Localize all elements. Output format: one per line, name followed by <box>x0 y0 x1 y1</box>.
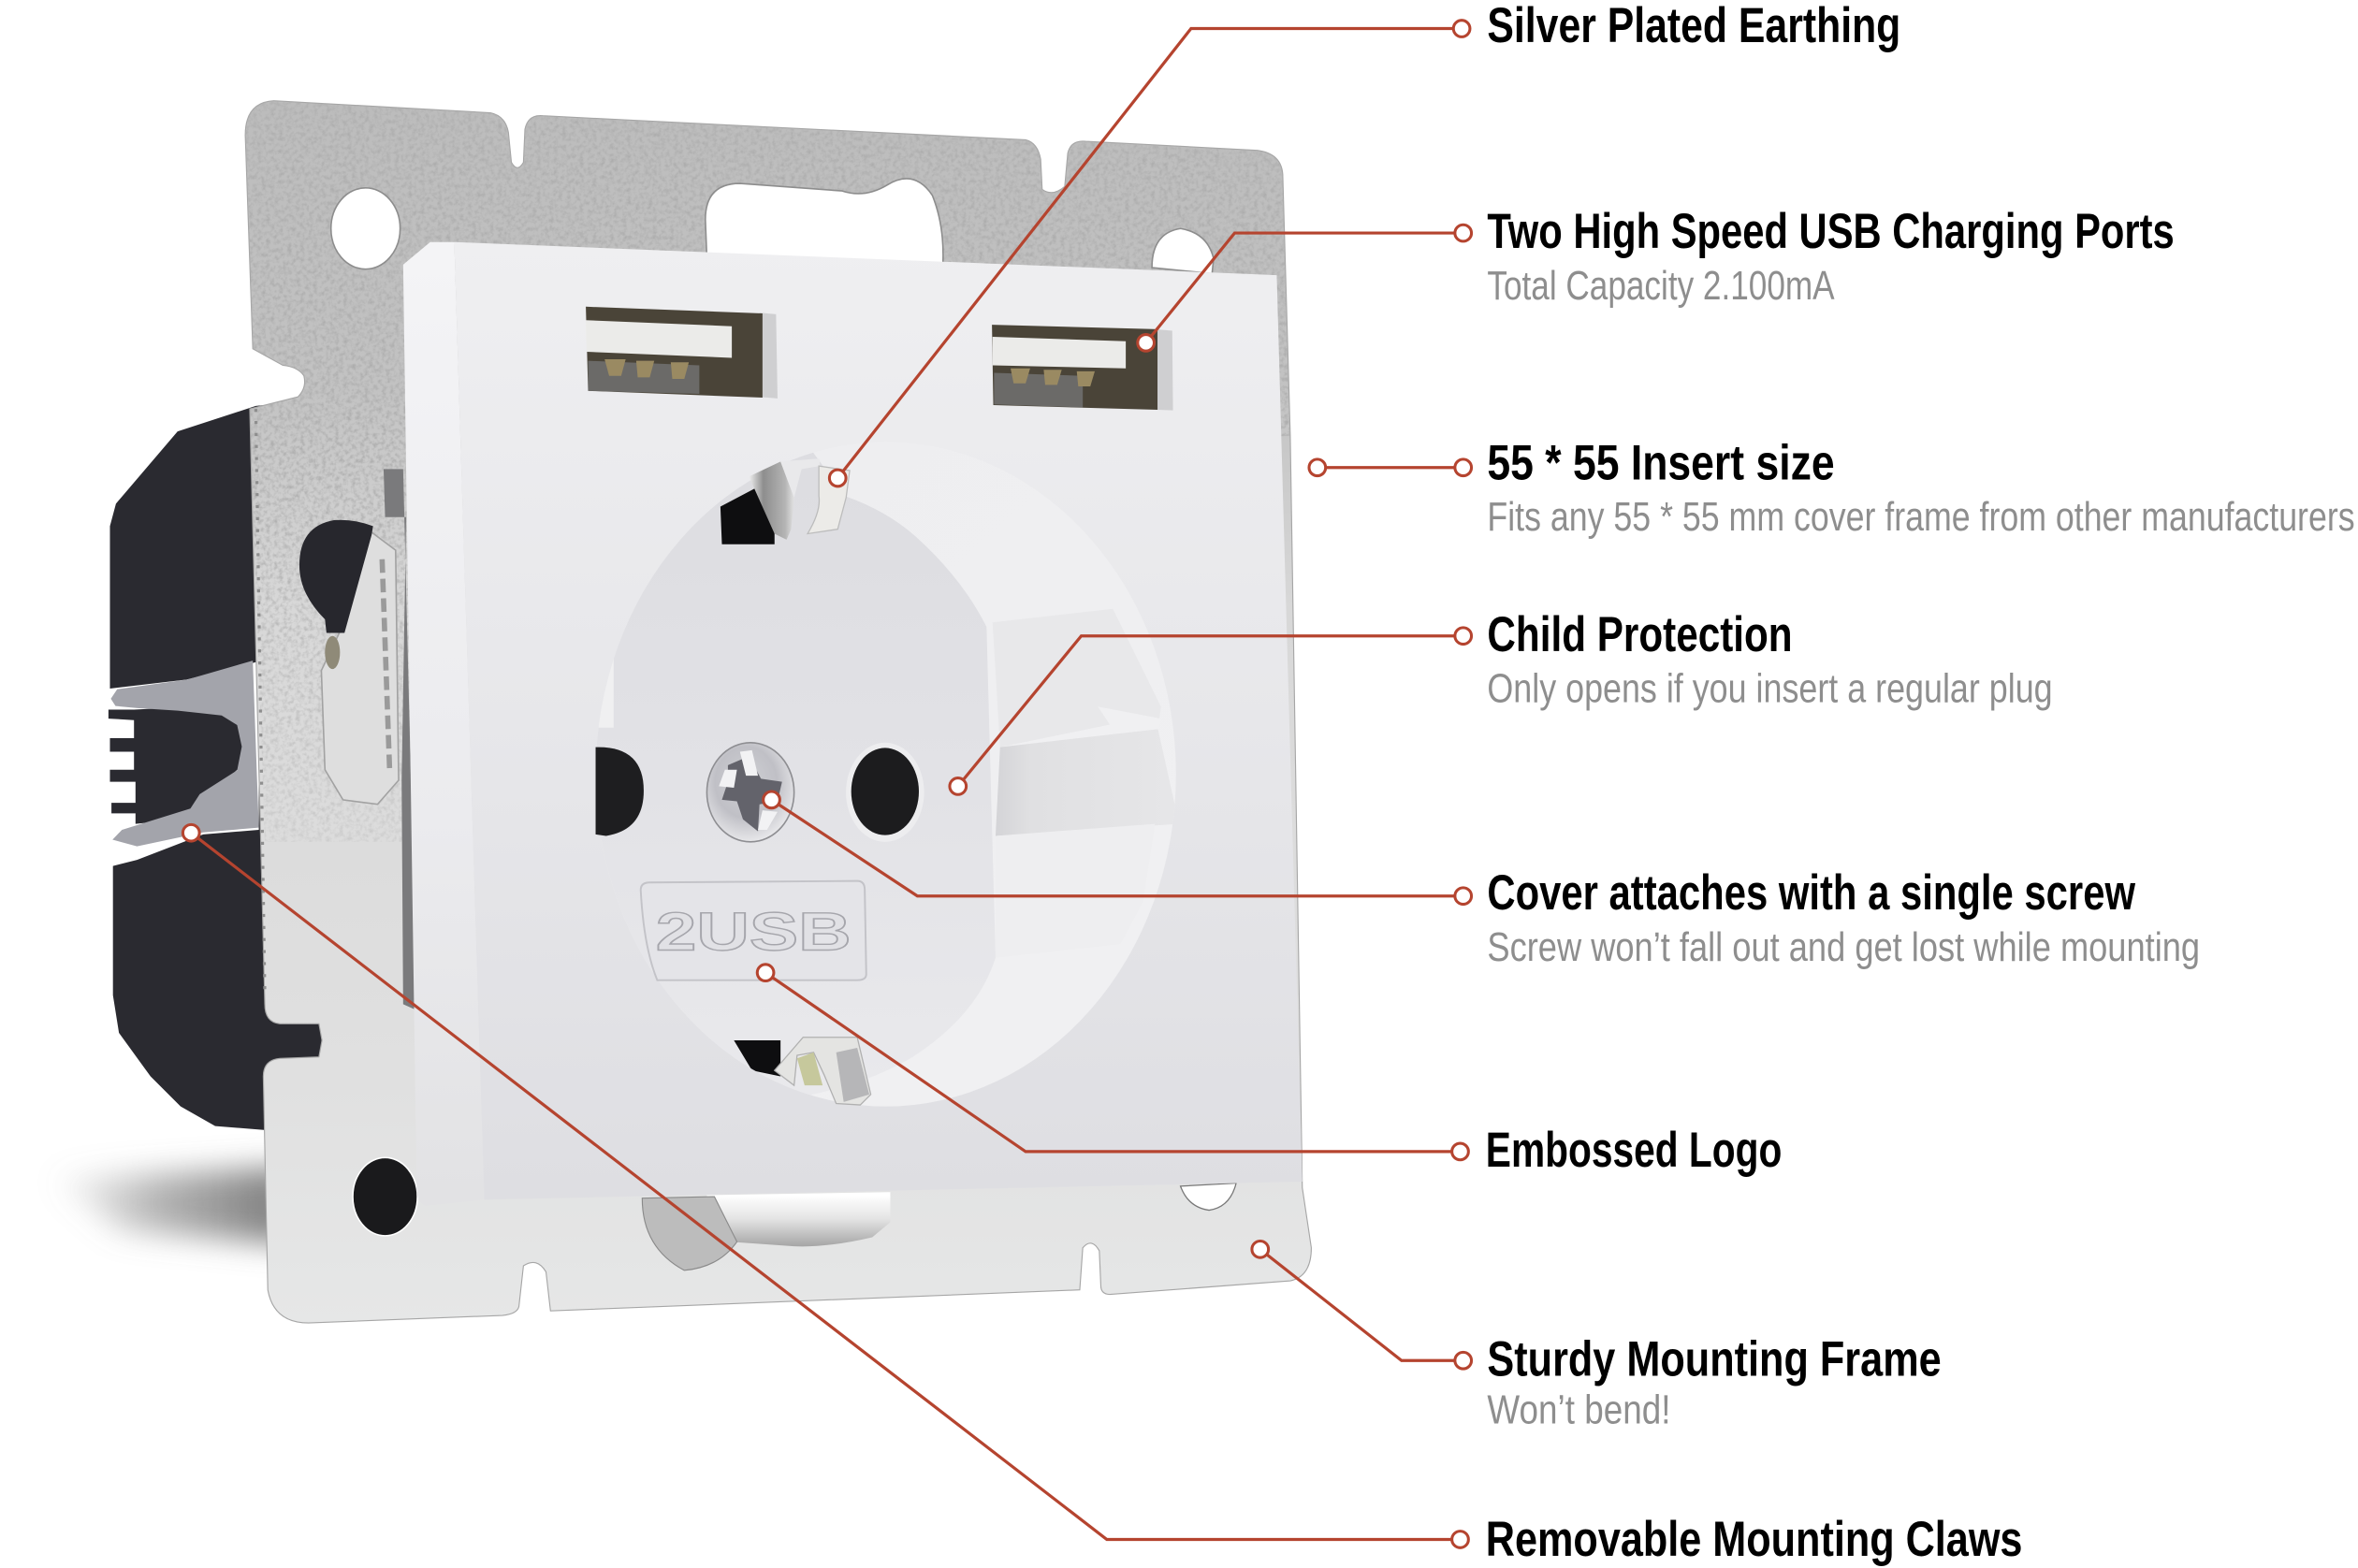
left white sliver <box>599 661 614 728</box>
label: Removable Mounting Claws <box>1486 1512 2022 1567</box>
end dot <box>1452 1532 1468 1547</box>
target dot <box>764 791 779 808</box>
left pin hole <box>596 748 644 835</box>
leader line <box>958 636 1463 786</box>
sublabel: Won’t bend! <box>1487 1388 1670 1433</box>
target dot <box>182 824 199 841</box>
upper guide block <box>993 609 1161 748</box>
metal mounting frame <box>245 101 1311 1323</box>
sublabel: Screw won’t fall out and get lost while mounting <box>1487 925 2200 970</box>
recessed guide band <box>996 729 1179 835</box>
target dot <box>829 470 846 486</box>
end dot <box>1452 1143 1468 1160</box>
callout: embossed logo <box>757 965 1782 1178</box>
leader line <box>191 833 1460 1539</box>
callout: mounting claws <box>182 824 2022 1567</box>
callout: single screw <box>764 791 2200 970</box>
central screw <box>706 743 794 842</box>
target dot <box>950 778 967 794</box>
end dot <box>1455 459 1472 476</box>
top silver earthing clip <box>749 458 850 540</box>
label: Sturdy Mounting Frame <box>1487 1331 1942 1387</box>
keyhole slot <box>299 520 399 805</box>
white cover plate front face <box>454 242 1303 1199</box>
recess floor <box>597 453 996 1017</box>
product photo: USB wall socket <box>52 101 1311 1323</box>
leader line <box>1317 467 1463 469</box>
frame speckled left edge <box>255 409 265 993</box>
callout: mounting frame <box>1252 1241 1942 1433</box>
white cover plate side face <box>403 242 485 1206</box>
end dot <box>1455 888 1472 905</box>
bottom slot right part <box>706 1192 890 1246</box>
leader line <box>765 973 1460 1152</box>
end dot <box>1455 225 1472 241</box>
logo text: 2USB <box>656 903 852 963</box>
label: Child Protection <box>1487 607 1793 662</box>
leader line <box>1146 233 1463 342</box>
left USB port <box>586 307 778 399</box>
sublabel: Only opens if you insert a regular plug <box>1487 666 2053 711</box>
callout: insert size <box>1309 436 2355 540</box>
end dot <box>1455 1352 1472 1369</box>
target dot <box>757 965 774 981</box>
end dot <box>1453 21 1470 36</box>
label: Cover attaches with a single screw <box>1487 865 2136 921</box>
embossed logo plate <box>641 881 866 980</box>
callout: child protection <box>950 607 2053 794</box>
top earthing cutout <box>720 488 775 544</box>
socket recess <box>587 442 1179 1107</box>
label: Two High Speed USB Charging Ports <box>1487 204 2175 259</box>
target dot <box>1138 335 1154 351</box>
right pin hole <box>846 743 924 842</box>
dark gap next to plate <box>384 469 416 1010</box>
gray removable claw <box>110 661 259 847</box>
end dot <box>1455 628 1472 645</box>
bottom earthing cutout <box>734 1040 780 1077</box>
leader line <box>772 800 1463 896</box>
callout: USB ports <box>1138 204 2175 351</box>
target dot <box>1252 1241 1269 1257</box>
right USB port <box>992 325 1173 411</box>
label: 55 * 55 Insert size <box>1487 436 1835 491</box>
sublabel: Total Capacity 2.100mA <box>1487 264 1835 309</box>
target dot <box>1309 459 1326 476</box>
leader line <box>837 29 1460 478</box>
floor shadow <box>52 1167 294 1245</box>
inner casing with fins <box>109 706 248 824</box>
label: Embossed Logo <box>1486 1123 1782 1178</box>
callout: Silver Plated Earthing <box>829 0 1900 486</box>
black rear casing <box>109 403 324 1130</box>
bottom slot left part <box>642 1197 737 1270</box>
metal grain texture <box>245 101 1290 842</box>
frame mounting holes <box>331 179 1236 1270</box>
bottom silver earthing clip <box>775 1038 871 1105</box>
leader line <box>1260 1249 1463 1360</box>
lower guide block <box>1011 824 1155 835</box>
ledge highlight <box>1000 706 1161 748</box>
